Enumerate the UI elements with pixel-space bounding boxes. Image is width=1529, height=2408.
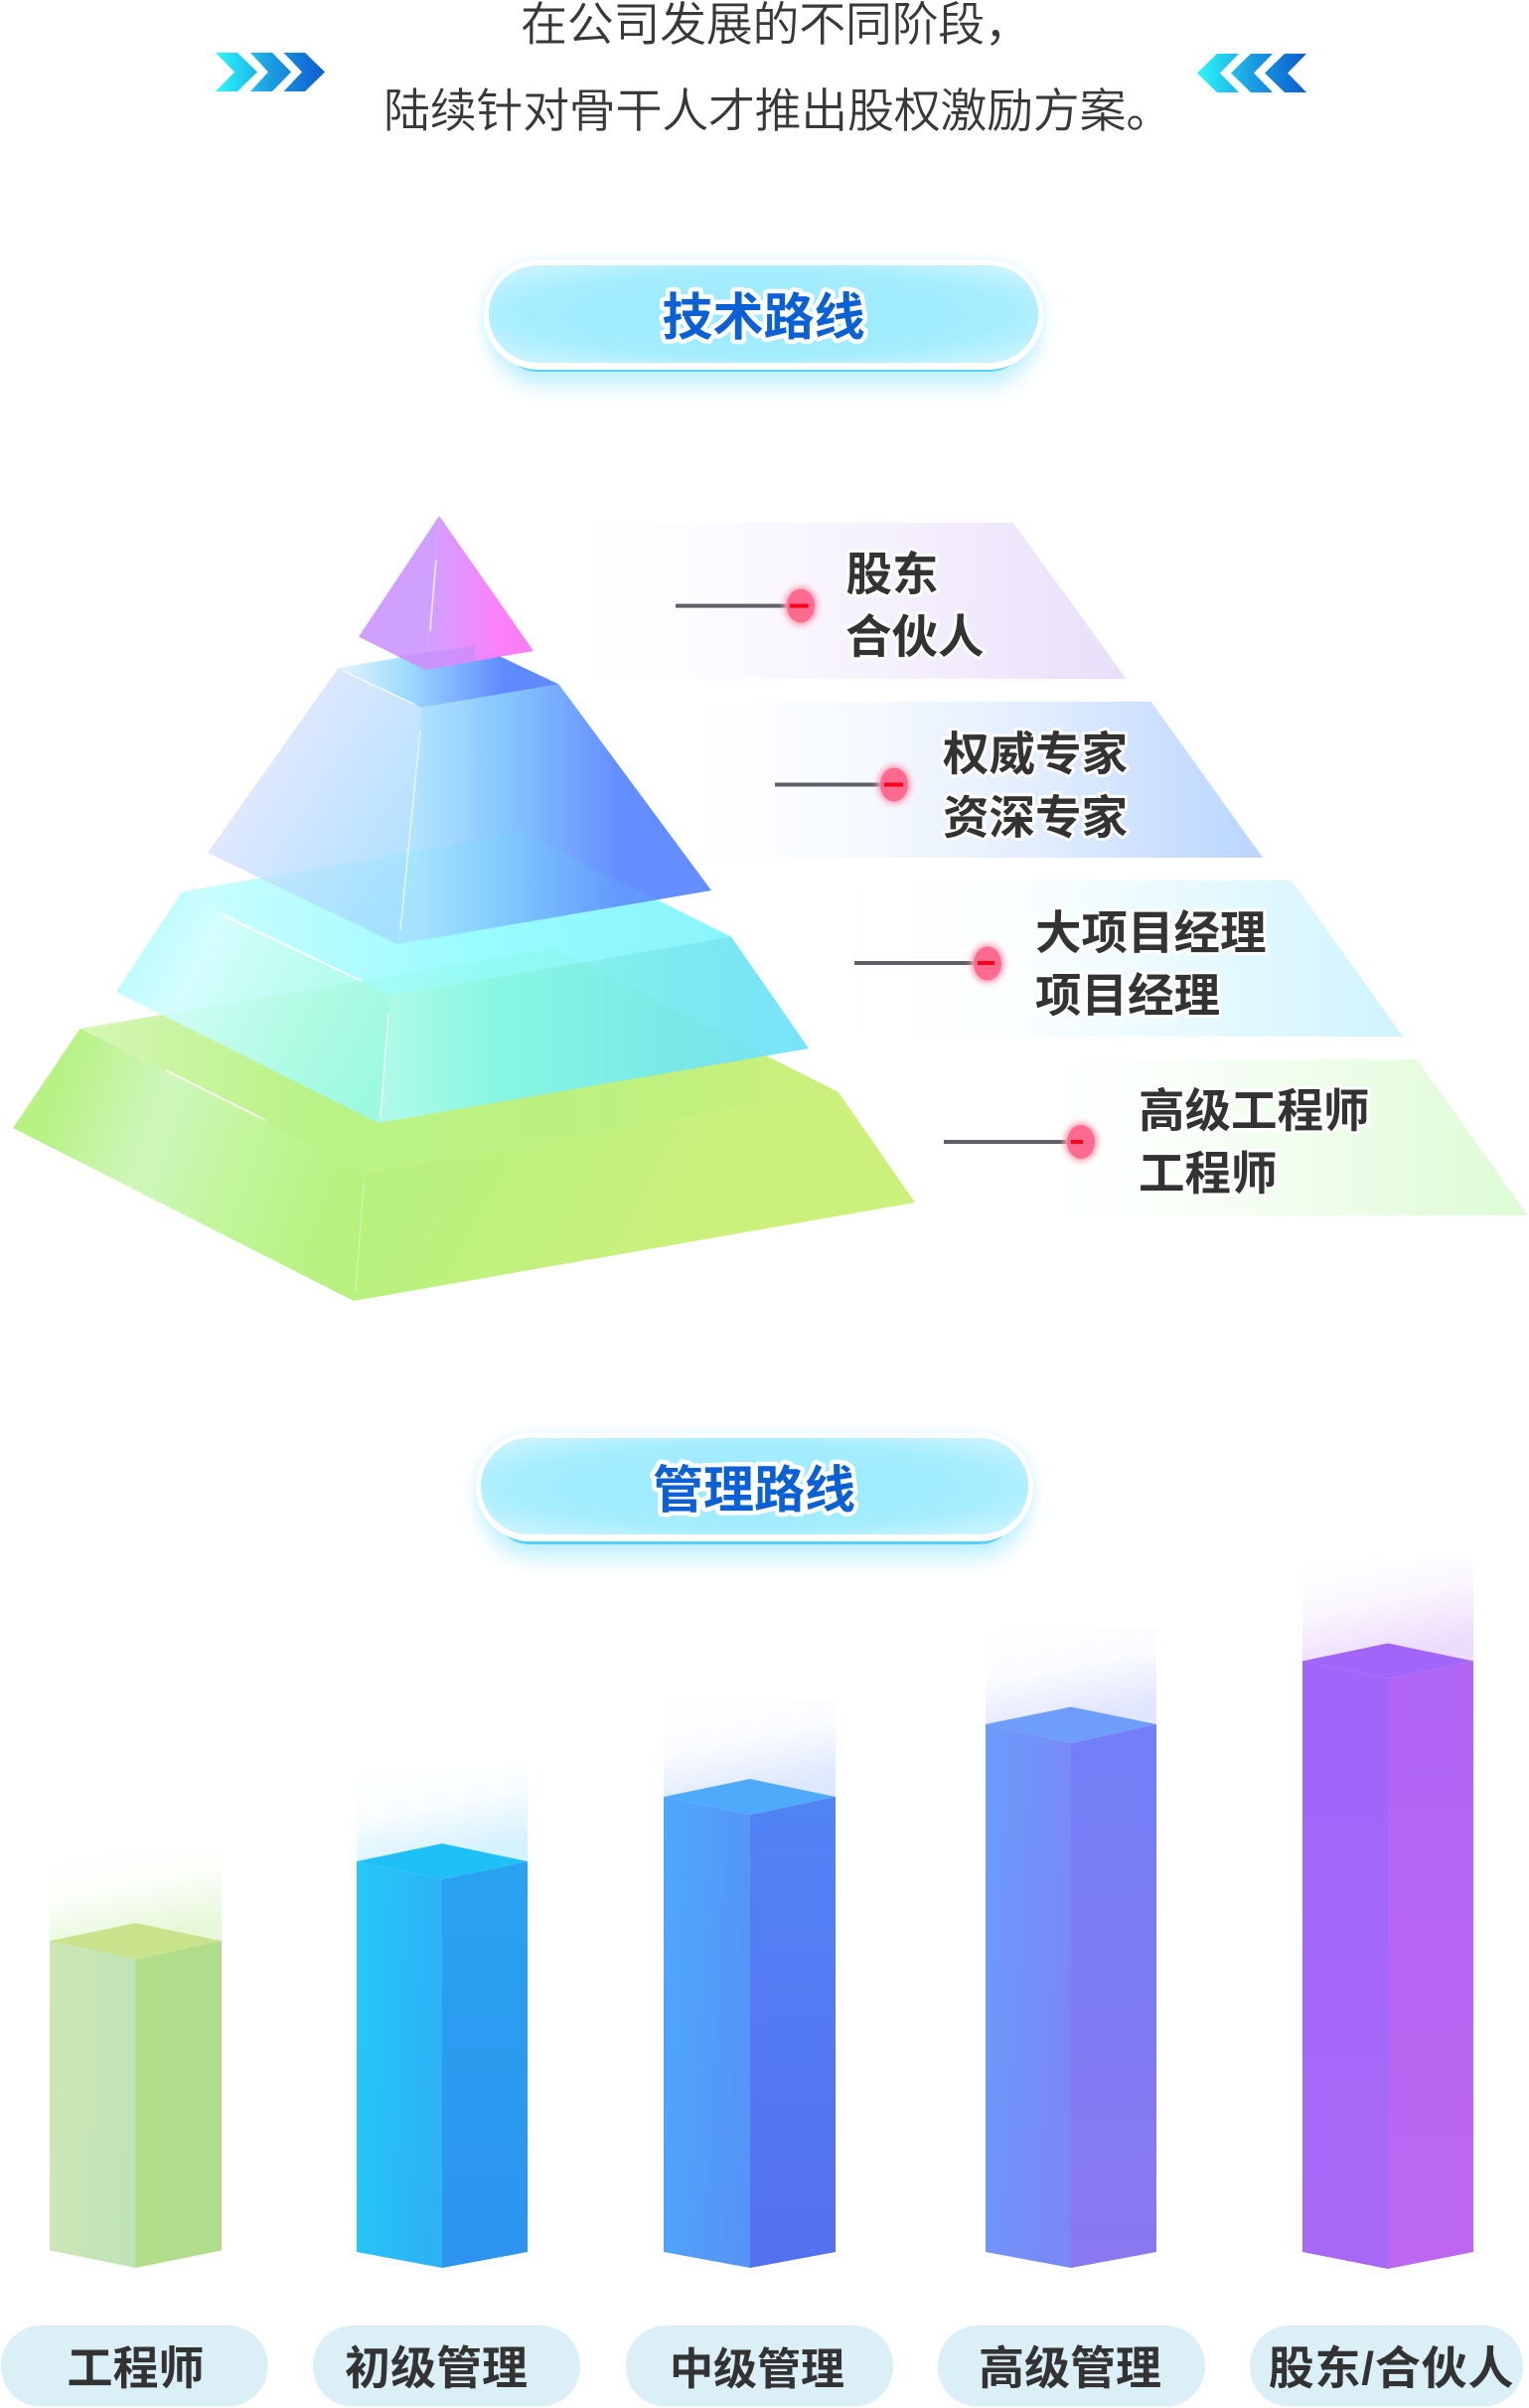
trapezoid label: 股东合伙人 xyxy=(586,523,1127,679)
bar: 股东/合伙人 xyxy=(1302,1560,1473,2269)
category pill: 工程师 xyxy=(1,2326,268,2407)
trapezoid label: 权威专家 资深专家: 权威专家 xyxy=(943,728,1128,780)
bar: 工程师 xyxy=(50,1850,222,2268)
trapezoid label: 高级工程师 工程师: 工程师 xyxy=(1139,1148,1278,1200)
trapezoid label: 高级工程师 工程师: 高级工程师 xyxy=(1139,1085,1369,1137)
pyramid layer 1: purple apex xyxy=(359,516,534,670)
category pill: 高级管理 xyxy=(938,2326,1205,2407)
bar chart xyxy=(50,1560,1473,2269)
heading pill: 管理路线 xyxy=(473,1433,1036,1557)
category pill: 股东/合伙人: 股东/合伙人 xyxy=(1269,2342,1514,2394)
pyramid layer 2: blue xyxy=(208,645,711,944)
trapezoid label: 权威专家 资深专家 xyxy=(695,702,1263,858)
heading pill: 技术路线: 技术路线 xyxy=(662,289,865,346)
bar: 中级管理 xyxy=(664,1699,836,2268)
pyramid layer 4: green xyxy=(13,948,915,1301)
pyramid layer 3: cyan xyxy=(116,833,809,1123)
category pill: 中级管理 xyxy=(626,2326,893,2407)
intro text: 陆续针对骨干人才推出股权激励方案。 xyxy=(383,84,1172,137)
pyramid xyxy=(13,516,915,1301)
category pill: 初级管理: 初级管理 xyxy=(345,2342,528,2394)
bar: 初级管理 xyxy=(357,1767,528,2268)
trapezoid label: 大项目经理 项目经理 xyxy=(854,881,1403,1037)
heading pill: 技术路线 xyxy=(481,260,1046,385)
connector with red dot xyxy=(944,1122,1098,1162)
trapezoid label: 股东合伙人: 合伙人 xyxy=(845,611,984,663)
trapezoid label: 股东合伙人: 股东 xyxy=(846,549,938,600)
connector with red dot xyxy=(775,765,911,805)
intro text xyxy=(383,0,1172,137)
trapezoid label: 大项目经理 项目经理: 项目经理 xyxy=(1035,970,1220,1022)
category pill: 工程师: 工程师 xyxy=(68,2342,205,2394)
icon: right chevrons xyxy=(1197,54,1306,92)
category pill: 股东/合伙人 xyxy=(1250,2326,1523,2407)
trapezoid label: 高级工程师 工程师 xyxy=(944,1059,1528,1215)
connector with red dot xyxy=(676,586,818,626)
category pill: 初级管理 xyxy=(313,2326,580,2407)
trapezoid label: 权威专家 资深专家: 资深专家 xyxy=(943,792,1128,844)
heading pill: 管理路线: 管理路线 xyxy=(653,1462,855,1519)
category pill: 中级管理: 中级管理 xyxy=(670,2345,844,2394)
connector with red dot xyxy=(854,944,1004,984)
trapezoid label: 大项目经理 项目经理: 大项目经理 xyxy=(1035,907,1266,959)
category pill: 高级管理: 高级管理 xyxy=(979,2342,1161,2394)
bar: 高级管理 xyxy=(986,1628,1156,2268)
icon: left chevrons xyxy=(216,53,325,91)
